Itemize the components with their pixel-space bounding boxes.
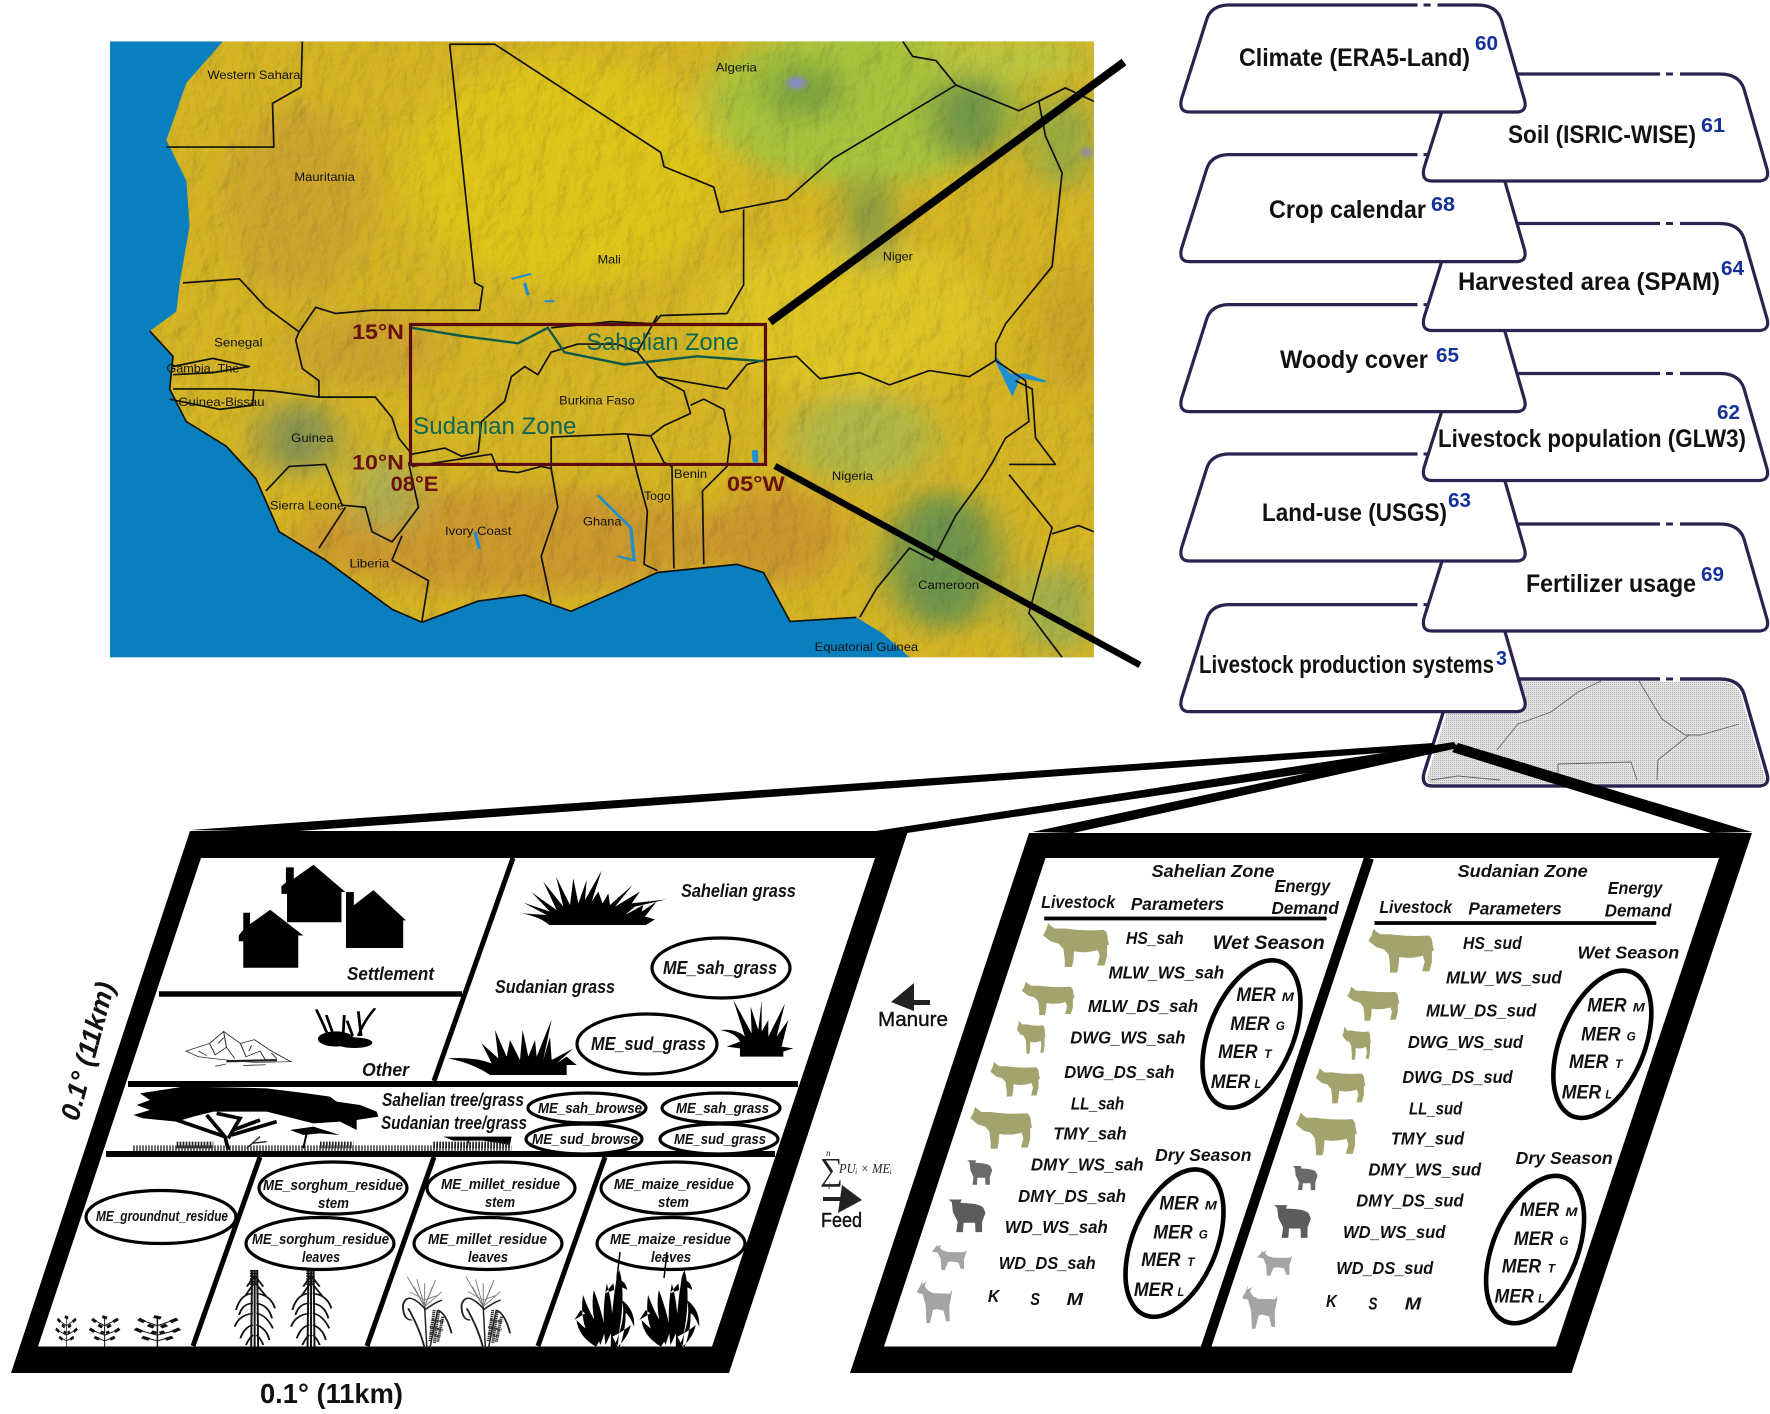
oval: ME_sud_grass: ME_sud_grass	[591, 1034, 706, 1054]
oval: Sahelian dry season energy demand: MER	[1159, 1193, 1199, 1214]
oval: Sudanian dry season energy demand: MER	[1502, 1256, 1542, 1277]
country labels: Equatorial Guinea	[815, 641, 918, 654]
oval: ME_sorghum_residue leaves	[246, 1218, 394, 1270]
Sudanian parameter list: S	[1368, 1294, 1378, 1313]
oval: ME_groundnut_residue: ME_groundnut_residue	[96, 1208, 228, 1225]
country labels: Sierra Leone	[270, 500, 344, 512]
study area rectangle	[411, 325, 765, 464]
country labels: Benin	[674, 468, 707, 481]
Sudanian column headers: Parameters	[1468, 899, 1562, 918]
Sahelian parameter list: MLW_DS_sah	[1088, 996, 1198, 1016]
Sahelian parameter list: DWG_WS_sah	[1070, 1028, 1185, 1047]
oval: Sudanian wet season energy demand: MER	[1581, 1024, 1621, 1045]
icon: millet plants	[403, 1277, 510, 1348]
data layer: Crop calendar	[1181, 155, 1525, 262]
oval: Sahelian wet season energy demand: M	[1282, 991, 1294, 1004]
country labels: Niger	[883, 251, 913, 263]
oval: Sudanian wet season energy demand: T	[1615, 1058, 1623, 1071]
data layer: Harvested area: 64	[1721, 258, 1745, 280]
icons: Sudanian livestock silhouettes	[1242, 929, 1434, 1329]
icon: groundnut plants	[56, 1316, 180, 1347]
Sahelian column headers: Energy	[1275, 876, 1331, 896]
Sudanian parameter list: LL_sud	[1409, 1099, 1463, 1118]
arrow: feed	[823, 1185, 862, 1213]
mountain peaks	[787, 77, 1091, 157]
oval: ME_maize_residue stem: stem	[658, 1194, 689, 1211]
Sahelian column headers: Parameters	[1131, 894, 1224, 914]
Sudanian parameter list: WD_DS_sud	[1336, 1258, 1434, 1278]
label: Manure: Manure	[878, 1009, 948, 1031]
Sahelian/Sudanian boundary line	[412, 328, 764, 364]
zone labels: Sudanian Zone	[413, 412, 576, 439]
label: Feed: Feed	[821, 1210, 862, 1232]
data layer: Climate: 60	[1475, 33, 1498, 55]
oval: Sahelian wet season energy demand: MER	[1218, 1041, 1258, 1062]
data layer: Climate	[1181, 5, 1525, 112]
oval: ME_millet_residue leaves: ME_millet_residue	[428, 1231, 547, 1248]
data layer: Crop calendar: Crop calendar	[1269, 196, 1426, 224]
label: Sahelian tree/grass: Sahelian tree/grass	[382, 1090, 524, 1110]
data layer: Soil: Soil (ISRIC-WISE)	[1508, 121, 1696, 149]
oval: Sudanian wet season energy demand	[1536, 965, 1669, 1123]
oval: Sudanian dry season energy demand: MER	[1514, 1229, 1554, 1250]
country labels: Guinea-Bissau	[178, 396, 265, 409]
country labels: Senegal	[214, 337, 263, 349]
lakes and rivers	[475, 274, 1045, 560]
Sahelian parameter list: LL_sah	[1071, 1094, 1124, 1113]
season labels: Wet Season	[1213, 931, 1325, 953]
maize tassels overlapping the oval	[617, 1252, 667, 1278]
data layer: Fertilizer usage	[1423, 524, 1768, 631]
label: Sahelian grass: Sahelian grass	[681, 881, 796, 901]
oval: Sahelian wet season energy demand: L	[1255, 1078, 1261, 1091]
icon: settlement houses	[239, 865, 406, 968]
label: Settlement: Settlement	[347, 964, 435, 984]
Sahelian parameter list: K	[988, 1286, 1001, 1306]
icon: maize plants	[574, 1270, 699, 1347]
oval: ME_sorghum_residue stem: ME_sorghum_residue	[263, 1177, 403, 1194]
data layer: Livestock production systems: 3	[1496, 648, 1507, 670]
label: Other: Other	[362, 1060, 410, 1080]
icons: Sahelian livestock silhouettes	[917, 923, 1109, 1323]
icon: Sudanian grass	[448, 1019, 577, 1075]
oval: ME_maize_residue leaves	[597, 1218, 745, 1270]
Sahelian parameter list: DMY_DS_sah	[1018, 1186, 1126, 1206]
oval: ME_sud_grass tree layer: ME_sud_grass	[674, 1131, 766, 1148]
Sahelian parameter list: M	[1067, 1289, 1084, 1309]
oval: Sahelian dry season energy demand: L	[1178, 1286, 1184, 1299]
Sudanian parameter list: WD_WS_sud	[1343, 1222, 1446, 1242]
zone labels	[413, 329, 739, 439]
Sudanian parameter list: DWG_WS_sud	[1408, 1032, 1524, 1052]
data layer: Crop calendar: 68	[1431, 194, 1455, 216]
oval: Sudanian dry season energy demand: MER	[1494, 1286, 1534, 1307]
data layer: Woody cover	[1181, 305, 1525, 412]
relief shading	[110, 41, 1094, 657]
Sahelian column headers: Sahelian Zone	[1151, 861, 1275, 881]
coordinate labels	[352, 320, 785, 496]
oval: Sahelian dry season energy demand	[1108, 1164, 1241, 1322]
oval: ME_sah_grass: ME_sah_grass	[663, 958, 777, 978]
oval: Sudanian wet season energy demand: MER	[1562, 1082, 1602, 1103]
oval: ME_maize_residue stem	[601, 1162, 749, 1214]
oval: Sahelian dry season energy demand: M	[1205, 1199, 1217, 1212]
formula: feed energy sum: ∑	[820, 1151, 843, 1187]
country labels: Burkina Faso	[559, 395, 635, 407]
oval: Sudanian wet season energy demand: G	[1627, 1030, 1636, 1043]
oval: Sahelian wet season energy demand	[1185, 955, 1318, 1113]
Sahelian parameter list: DMY_WS_sah	[1031, 1155, 1144, 1174]
oval: ME_sud_grass	[577, 1014, 717, 1074]
Sudanian parameter list: HS_sud	[1463, 933, 1522, 953]
panel: livestock parameters and energy demand	[850, 833, 1752, 1373]
formula: feed energy sum: n	[826, 1148, 831, 1158]
data layer: Soil: 61	[1701, 115, 1725, 137]
icon: Sudanian grass tuft	[720, 1000, 793, 1057]
country labels: Liberia	[349, 558, 389, 571]
data layer: Livestock production systems	[1181, 605, 1525, 712]
icons: grass tufts	[448, 871, 793, 1075]
Sudanian parameter list: K	[1326, 1291, 1338, 1311]
zoom line lower	[775, 466, 1140, 665]
oval: ME_millet_residue leaves	[414, 1218, 562, 1270]
coordinate labels: 08°E	[391, 472, 438, 496]
oval: Sahelian dry season energy demand: MER	[1141, 1249, 1181, 1270]
oval: ME_millet_residue leaves: leaves	[468, 1249, 508, 1266]
Sahelian column headers	[1041, 861, 1339, 920]
Sahelian parameter list: WD_DS_sah	[999, 1253, 1096, 1273]
data layer: Livestock population: 62	[1717, 402, 1740, 424]
oval: ME_sorghum_residue stem: stem	[318, 1195, 349, 1212]
country labels: Cameroon	[918, 579, 979, 592]
Sahelian parameter list: DWG_DS_sah	[1064, 1062, 1175, 1082]
Sahelian parameter list	[988, 928, 1224, 1309]
terrain colour zones	[226, 22, 1112, 654]
data layer: Harvested area	[1423, 224, 1768, 330]
oval: ME_sah_grass tree layer: ME_sah_grass	[676, 1100, 769, 1117]
oval: ME_sah_grass	[652, 938, 790, 998]
funnel lines from grid cell to panels	[190, 742, 1752, 833]
season labels	[1155, 931, 1679, 1168]
country labels: Algeria	[716, 62, 757, 75]
oval: Sudanian dry season energy demand: G	[1559, 1235, 1569, 1248]
country borders	[150, 41, 1094, 657]
oval: Sudanian dry season energy demand: M	[1565, 1205, 1578, 1219]
oval: ME_groundnut_residue	[86, 1190, 236, 1244]
oval: Sahelian wet season energy demand: MER	[1230, 1014, 1270, 1035]
data layer: Woody cover: Woody cover	[1280, 346, 1428, 374]
Sudanian column headers: Sudanian Zone	[1458, 861, 1588, 881]
panel: land use and feed resources grid cell	[11, 831, 908, 1373]
country labels: Ivory Coast	[445, 525, 512, 538]
oval: ME_sorghum_residue leaves: ME_sorghum_residue	[252, 1231, 389, 1248]
arrow: manure	[891, 983, 930, 1011]
panel: West Africa map	[110, 22, 1112, 657]
icons: sorghum, millet and maize plants	[235, 1270, 699, 1348]
data layer: Woody cover: 65	[1436, 345, 1459, 367]
zone divider	[1205, 858, 1369, 1350]
oval: ME_sorghum_residue stem	[259, 1162, 407, 1214]
oval: ME_sud_grass tree layer	[660, 1124, 778, 1154]
Sudanian parameter list: DMY_DS_sud	[1356, 1191, 1464, 1210]
Sudanian parameter list: TMY_sud	[1391, 1129, 1465, 1148]
oval: Sahelian dry season energy demand: MER	[1134, 1280, 1174, 1301]
land mass	[150, 41, 1094, 657]
Sahelian parameter list: HS_sah	[1126, 928, 1184, 948]
oval: ME_millet_residue stem: stem	[485, 1194, 515, 1211]
coordinate labels: 15°N	[352, 320, 404, 344]
data layer: Land-use	[1181, 454, 1525, 561]
data layer: Climate: Climate (ERA5-Land)	[1239, 44, 1470, 72]
oval: Sahelian wet season energy demand: MER	[1211, 1072, 1251, 1093]
oval: ME_sud_browse	[526, 1124, 642, 1154]
label: Sudanian tree/grass: Sudanian tree/grass	[381, 1113, 527, 1133]
Sudanian parameter list: MLW_WS_sud	[1446, 968, 1562, 987]
oval: Sahelian dry season energy demand: G	[1199, 1228, 1208, 1242]
oval: Sahelian dry season energy demand: T	[1187, 1255, 1195, 1269]
oval: ME_sah_browse: ME_sah_browse	[538, 1100, 642, 1117]
Sudanian column headers: Livestock	[1379, 897, 1453, 917]
country labels: Nigeria	[832, 470, 873, 483]
data layer: Livestock production systems: Livestock production systems	[1199, 651, 1494, 679]
season labels: Dry Season	[1516, 1148, 1613, 1168]
data layer: gridded study area map	[1423, 679, 1768, 786]
data layer: Land-use: Land-use (USGS)	[1262, 499, 1447, 527]
Sahelian column headers: Livestock	[1041, 892, 1116, 912]
oval: Sudanian wet season energy demand: MER	[1587, 995, 1627, 1016]
data layer: Soil	[1423, 74, 1768, 181]
oval: ME_maize_residue leaves: leaves	[651, 1249, 691, 1266]
oval: ME_maize_residue stem: ME_maize_residue	[614, 1176, 734, 1193]
country labels: Gambia, The	[166, 363, 239, 376]
Sudanian parameter list: DMY_WS_sud	[1368, 1160, 1482, 1179]
season labels: Wet Season	[1578, 943, 1679, 962]
Sahelian parameter list: MLW_WS_sah	[1108, 963, 1224, 982]
icon: sorghum plants	[235, 1270, 331, 1347]
icon: acacia tree savanna	[133, 1087, 512, 1150]
Sahelian parameter list: S	[1030, 1289, 1040, 1309]
country labels: Ghana	[583, 516, 622, 529]
dimension label: side: 0.1° (11km)	[55, 979, 121, 1124]
data layer: Land-use: 63	[1448, 490, 1471, 512]
oval: Sahelian wet season energy demand: G	[1276, 1020, 1285, 1033]
label: Sudanian grass: Sudanian grass	[495, 977, 615, 997]
oval: Sudanian dry season energy demand: T	[1548, 1262, 1556, 1275]
icons in left panel	[56, 865, 406, 1347]
zone labels: Sahelian Zone	[586, 329, 739, 355]
icon: Sahelian grass	[522, 871, 667, 925]
oval: ME_sah_browse	[528, 1093, 646, 1123]
formula: feed energy sum	[820, 1148, 892, 1191]
formula: feed energy sum: i	[828, 1181, 831, 1191]
data layer: Harvested area: Harvested area (SPAM)	[1458, 268, 1720, 296]
country labels: Mali	[598, 254, 621, 266]
dimension label: bottom: 0.1° (11km)	[260, 1378, 403, 1409]
data layer: Fertilizer usage: Fertilizer usage	[1526, 570, 1696, 598]
data layer: Livestock population	[1423, 374, 1768, 480]
oval: ME_maize_residue leaves: ME_maize_residue	[610, 1231, 731, 1248]
country labels: Guinea	[291, 432, 334, 445]
Sudanian column headers: Demand	[1605, 901, 1672, 920]
oval: Sudanian dry season energy demand: MER	[1520, 1199, 1560, 1220]
Sahelian column headers: Demand	[1271, 898, 1339, 918]
oval: Sudanian dry season energy demand	[1468, 1171, 1602, 1328]
Sahelian parameter list: TMY_sah	[1053, 1124, 1127, 1143]
season labels: Dry Season	[1155, 1145, 1251, 1165]
panel dividers	[106, 858, 798, 1346]
country labels: Mauritania	[294, 171, 355, 184]
oval: Sahelian wet season energy demand: T	[1264, 1047, 1272, 1061]
Sudanian parameter list: MLW_DS_sud	[1426, 1001, 1537, 1020]
Sudanian column headers: Energy	[1608, 878, 1663, 898]
coordinate labels: 10°N	[352, 451, 404, 475]
oval: Sudanian dry season energy demand: L	[1538, 1292, 1545, 1306]
Sahelian parameter list: WD_WS_sah	[1005, 1217, 1108, 1237]
country labels: Western Sahara	[207, 69, 300, 82]
zoom line upper	[770, 62, 1124, 322]
icon: rocky mountain	[186, 1031, 291, 1066]
data layer: Fertilizer usage: 69	[1701, 564, 1724, 586]
oval: ME_sud_browse: ME_sud_browse	[532, 1131, 638, 1148]
oval: Sudanian wet season energy demand: M	[1633, 1001, 1645, 1014]
oval: Sahelian wet season energy demand: MER	[1236, 985, 1276, 1006]
relief brightening	[110, 41, 1094, 657]
oval: ME_millet_residue stem: ME_millet_residue	[441, 1176, 560, 1193]
Sudanian parameter list: DWG_DS_sud	[1402, 1067, 1513, 1087]
oval: Sudanian wet season energy demand: MER	[1569, 1052, 1609, 1073]
ocean overlay	[110, 41, 909, 657]
oval: ME_millet_residue stem	[427, 1162, 575, 1214]
formula: feed energy sum: PUᵢ × MEᵢ	[838, 1162, 892, 1177]
oval: Sahelian dry season energy demand: MER	[1153, 1222, 1193, 1243]
oval: ME_sorghum_residue leaves: leaves	[302, 1249, 340, 1266]
Sudanian parameter list	[1326, 933, 1562, 1313]
oval: Sudanian wet season energy demand: L	[1605, 1088, 1612, 1101]
Sudanian column headers	[1374, 861, 1672, 925]
coordinate labels: 05°W	[727, 472, 785, 496]
country labels: Togo	[644, 490, 671, 503]
oval: ME_sah_grass tree layer	[662, 1093, 780, 1123]
country labels	[166, 62, 979, 654]
Sudanian parameter list: M	[1405, 1294, 1422, 1313]
icon: wetland	[316, 1008, 375, 1048]
